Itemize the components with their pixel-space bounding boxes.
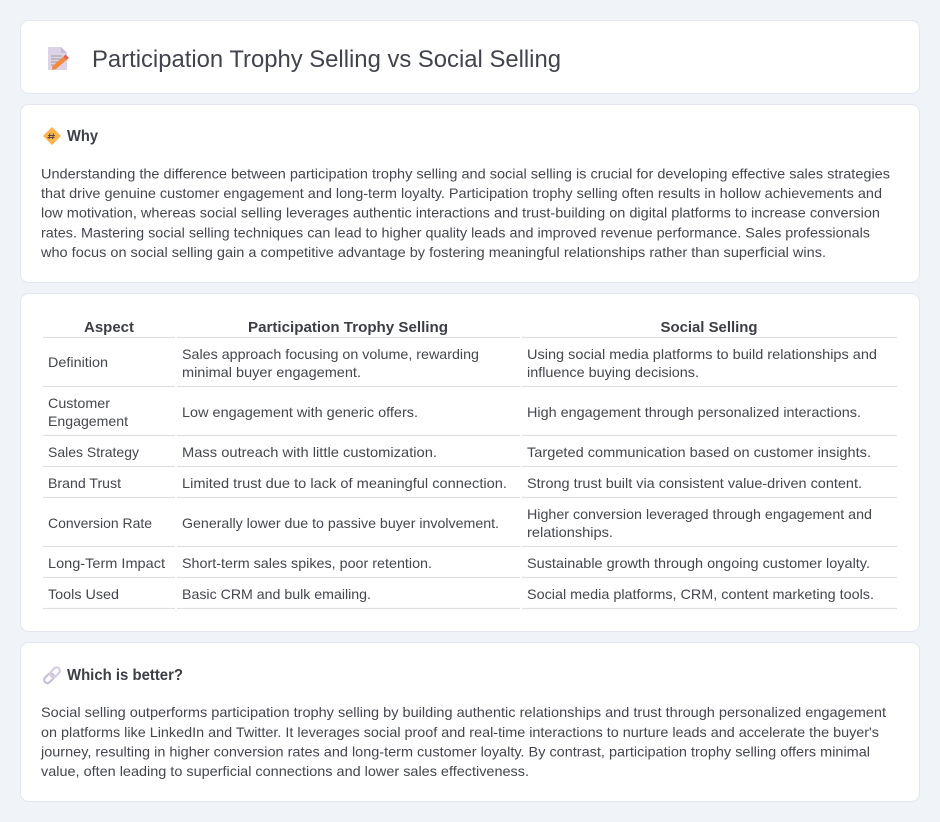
table row: tools used: Basic CRM and bulk emailing. bbox=[182, 586, 371, 602]
panel: comparison table bbox=[20, 294, 920, 632]
table row: sales strategy: Sales Strategy bbox=[48, 444, 139, 460]
icon: diamond sign bbox=[44, 128, 60, 144]
text block: why paragraph: Understanding the difference between participation trophy selling and social selling is crucial for developing effective sales strategies bbox=[41, 166, 890, 182]
table row: brand trust: Brand Trust bbox=[48, 475, 121, 491]
panel: why bbox=[20, 104, 920, 282]
table row: customer engagement: Engagement bbox=[48, 413, 128, 429]
table row: definition: Definition bbox=[48, 354, 108, 370]
heading: which is better: Which is better? bbox=[67, 667, 183, 684]
table row: conversion rate: relationships. bbox=[527, 524, 613, 540]
table row: definition: Sales approach focusing on volume, rewarding bbox=[182, 346, 479, 362]
table row: brand trust: Strong trust built via consistent value-driven content. bbox=[527, 475, 862, 491]
panel: header bbox=[20, 20, 920, 94]
table row: customer engagement: Customer bbox=[48, 395, 110, 411]
table row: long-term impact: Sustainable growth through ongoing customer loyalty. bbox=[527, 555, 870, 571]
text block: which is better paragraph: value, often leading to superficial connections and lower sales effectiveness. bbox=[41, 763, 529, 779]
panel: which is better bbox=[20, 642, 920, 802]
table row: conversion rate bbox=[48, 506, 872, 540]
text block: which is better paragraph: on platforms like LinkedIn and Twitter. It leverages social proof and real-time interactions to nurture leads and accelerate the buyer's bbox=[41, 724, 879, 740]
table row: conversion rate: Conversion Rate bbox=[48, 515, 152, 531]
table row: definition bbox=[48, 346, 877, 380]
table row: definition: influence buying decisions. bbox=[527, 364, 699, 380]
text block: which is better paragraph: Social selling outperforms participation trophy selling by building authentic relationships and trust through personalized engagement bbox=[41, 704, 886, 720]
text block: which is better paragraph bbox=[40, 704, 886, 779]
text block: why paragraph: low motivation, whereas social selling leverages authentic interactions and trust-building on digital platforms to increase conversion bbox=[41, 205, 880, 221]
table row: sales strategy: Targeted communication based on customer insights. bbox=[527, 444, 871, 460]
table row: customer engagement: Low engagement with generic offers. bbox=[182, 404, 418, 420]
table row: long-term impact bbox=[48, 555, 870, 571]
table header row: Social Selling bbox=[660, 319, 758, 336]
table row: conversion rate: Generally lower due to passive buyer involvement. bbox=[182, 515, 499, 531]
table row: customer engagement bbox=[48, 395, 861, 429]
table row: brand trust bbox=[48, 475, 862, 491]
text block: why paragraph: that drive genuine customer engagement and long-term loyalty. Participation trophy selling often results in hollow achievements and bbox=[41, 185, 882, 201]
text block: which is better paragraph: journey, resulting in higher conversion rates and long-term customer loyalty. By contrast, participation trophy selling offers minimal bbox=[40, 744, 870, 760]
icon: link bbox=[43, 666, 61, 684]
table header row: Participation Trophy Selling bbox=[248, 319, 448, 336]
table row: sales strategy: Mass outreach with little customization. bbox=[182, 444, 437, 460]
table row: conversion rate: Higher conversion leveraged through engagement and bbox=[527, 506, 872, 522]
text block: why paragraph bbox=[40, 166, 890, 260]
table header row bbox=[84, 319, 758, 336]
table row: tools used: Tools Used bbox=[48, 586, 119, 602]
text block: why paragraph: who focus on social selling gain a competitive advantage by fostering meaningful relationships rather than superficial wins. bbox=[40, 244, 826, 260]
table header row: Aspect bbox=[84, 319, 134, 336]
heading: why: Why bbox=[67, 128, 98, 145]
icon: memo with pencil bbox=[48, 47, 69, 70]
table row: long-term impact: Short-term sales spikes, poor retention. bbox=[182, 555, 432, 571]
table row: definition: minimal buyer engagement. bbox=[182, 364, 361, 380]
title: Participation Trophy Selling vs Social Selling bbox=[92, 46, 561, 73]
table row: sales strategy bbox=[48, 444, 871, 460]
table row: brand trust: Limited trust due to lack of meaningful connection. bbox=[182, 475, 507, 491]
table row: tools used: Social media platforms, CRM, content marketing tools. bbox=[527, 586, 874, 602]
text block: why paragraph: rates. Mastering social selling techniques can lead to higher quality leads and improved revenue performance. Sales professionals bbox=[41, 224, 870, 240]
table row: tools used bbox=[48, 586, 874, 602]
table row: long-term impact: Long-Term Impact bbox=[48, 555, 165, 571]
table row: customer engagement: High engagement through personalized interactions. bbox=[527, 404, 861, 420]
table row: definition: Using social media platforms to build relationships and bbox=[527, 346, 877, 362]
